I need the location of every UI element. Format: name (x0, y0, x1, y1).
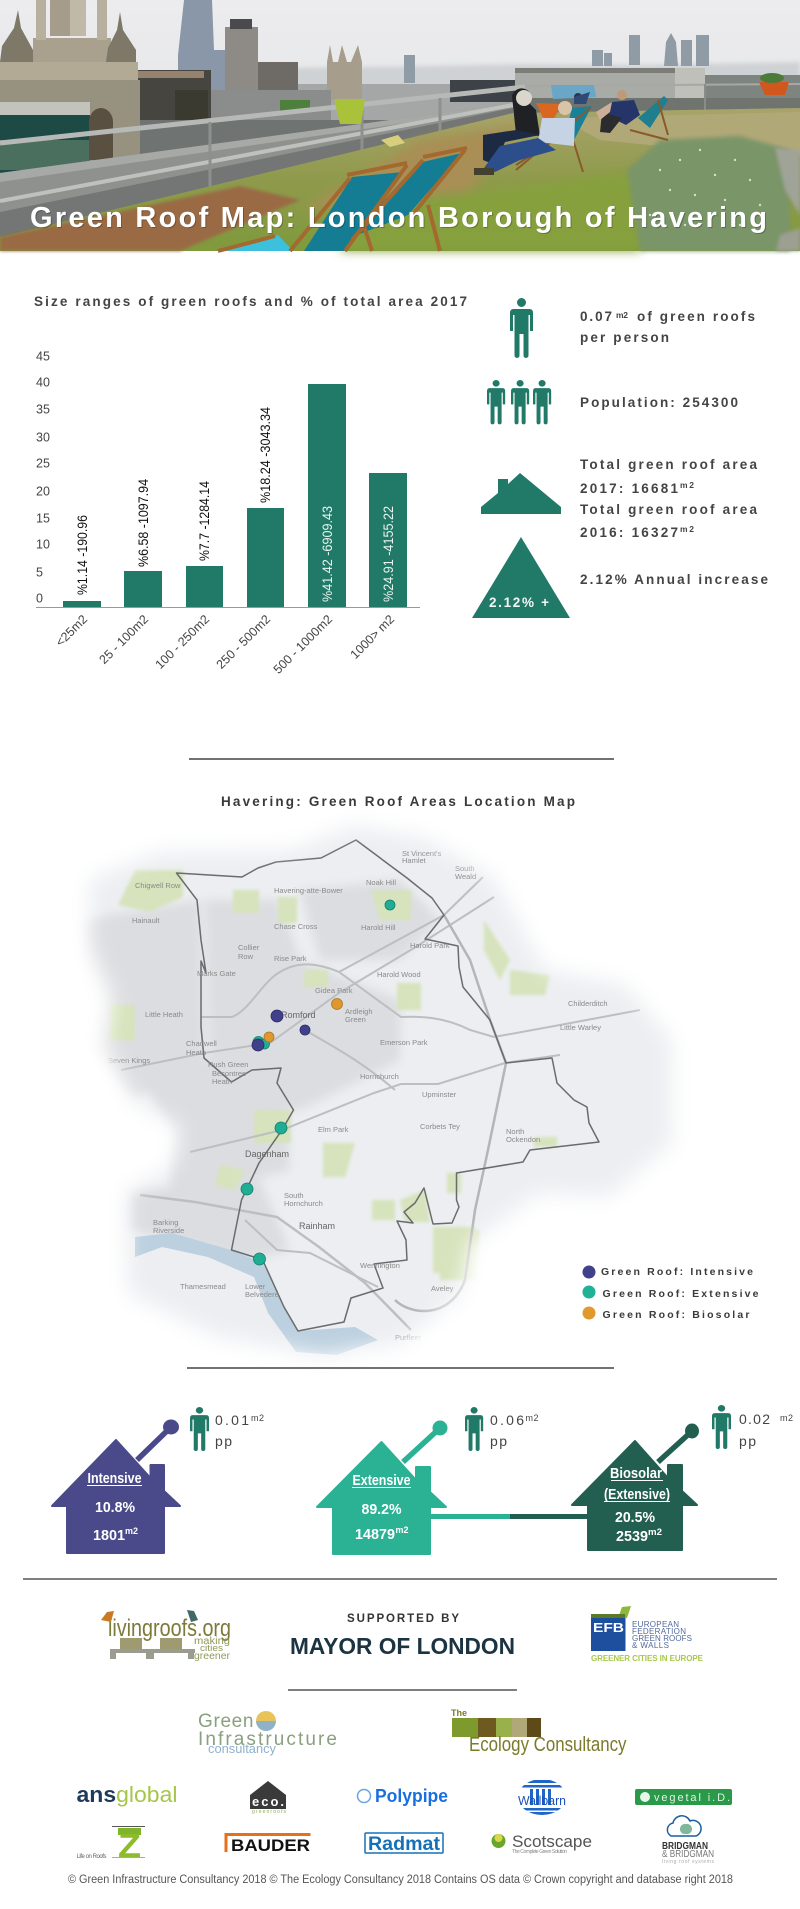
place labels: Hornchurch (360, 1072, 399, 1081)
logo: Green Infrastructure Consultancy (198, 1711, 337, 1756)
logo: livingroofs.org: greener (194, 1651, 231, 1662)
place labels: Rise Park (274, 954, 307, 963)
stat: total area: Total green roof area (580, 502, 757, 517)
place labels: Seven Kings (108, 1056, 150, 1065)
place labels: Romford (281, 1010, 316, 1020)
bar value labels: %18.24 -3043.34 (258, 407, 273, 503)
logo: Scotscape: The Complete Green Solution (512, 1849, 567, 1855)
logo: European Federation Green Roofs: EUROPEAN (632, 1620, 679, 1629)
y axis labels: 5 (36, 566, 43, 580)
logo: ZinCo: Life on Roofs (76, 1854, 106, 1860)
place labels: Noak Hill (366, 878, 396, 887)
logo: eco green roofs: greenroofs (252, 1809, 286, 1815)
supported by: Mayor of London: SUPPORTED BY (347, 1613, 459, 1625)
logo: Bridgman & Bridgman: BRIDGMAN (662, 1841, 708, 1852)
logo: Radmat: Radmat (368, 1834, 441, 1855)
logo: Green Infrastructure Consultancy: consultancy (208, 1741, 276, 1756)
markers: biosolar (264, 998, 342, 1042)
place labels: Ockendon (506, 1135, 540, 1144)
place labels: Becontree (212, 1069, 246, 1078)
markers: extensive (241, 900, 395, 1265)
place labels: Rainham (299, 1221, 335, 1231)
person stat: biosolar: pp (739, 1433, 756, 1449)
y axis labels: 30 (36, 430, 50, 444)
supported by: Mayor of London: MAYOR OF LONDON (290, 1633, 515, 1659)
icon: three people (487, 380, 551, 424)
stone building and tower (0, 0, 140, 200)
place labels: Chadwell (186, 1039, 217, 1048)
panel: biosolar house: m2 (648, 1527, 662, 1537)
place labels: Harold Park (410, 941, 450, 950)
map legend: Green Roof: Intensive (601, 1266, 753, 1278)
place labels: Harold Hill (361, 923, 396, 932)
place labels: Row (238, 952, 254, 961)
logo: vegetal i.D. (635, 1789, 732, 1805)
y axis labels: 45 (36, 350, 50, 364)
logo: The Ecology Consultancy (451, 1708, 626, 1756)
y axis labels: 25 (36, 456, 50, 470)
panel: extensive house: Extensive (352, 1472, 410, 1489)
place labels: Lower (245, 1282, 266, 1291)
panel: intensive house: Intensive (88, 1470, 142, 1487)
person stat: intensive: pp (215, 1433, 232, 1449)
y axis labels: 10 (36, 538, 50, 552)
bar value labels: %24.91 -4155.22 (381, 506, 396, 602)
place labels: Chase Cross (274, 922, 318, 931)
panel: biosolar house: (Extensive) (604, 1486, 670, 1503)
place labels: Purfleet (395, 1333, 422, 1342)
chart heading: Size ranges of green roofs and % of total area 2017 (34, 294, 467, 309)
place labels: Aveley (431, 1284, 454, 1293)
place labels: Childerditch (568, 999, 608, 1008)
stat: population: Population: 254300 (580, 395, 738, 410)
stat: total area: Total green roof area (580, 457, 757, 472)
hero photo: rooftop meadow with deck chairs and London skyline (0, 0, 800, 251)
logo: European Federation Green Roofs: GREENER CITIES IN EUROPE (591, 1654, 704, 1663)
bar value labels: %1.14 -190.96 (75, 515, 90, 595)
panel: extensive house: 14879 (355, 1526, 395, 1543)
title: Green Roof Map: London Borough of Havering (30, 202, 767, 234)
logo: Green Infrastructure Consultancy: Infrastructure (198, 1729, 337, 1750)
stat: total area (580, 457, 757, 540)
panel: extensive house (317, 1420, 448, 1554)
logo: Bridgman & Bridgman: & BRIDGMAN (662, 1849, 714, 1860)
panel: intensive house (52, 1420, 180, 1553)
planters and sign (334, 73, 789, 147)
place labels: Gidea Park (315, 986, 353, 995)
logo: European Federation Green Roofs: & WALLS (632, 1641, 669, 1650)
map legend: Green Roof: Biosolar (602, 1309, 750, 1321)
logo: livingroofs.org (101, 1610, 231, 1662)
panel: extensive house: m2 (396, 1525, 408, 1535)
logo: European Federation Green Roofs: GREEN ROOFS (632, 1634, 692, 1643)
person stat: biosolar: m2 (780, 1413, 793, 1423)
logo: European Federation Green Roofs: EFB (593, 1620, 624, 1635)
person stat: extensive: 0.06 (490, 1412, 524, 1428)
logo: European Federation Green Roofs (591, 1606, 704, 1663)
logo: Scotscape (492, 1832, 592, 1855)
category labels: 25 - 100m2 (97, 612, 151, 667)
logo: Scotscape: Scotscape (512, 1832, 592, 1851)
y axis labels: 15 (36, 512, 50, 526)
place labels: Barking (153, 1218, 178, 1227)
location map (84, 826, 674, 1356)
panel: biosolar house: 2539 (616, 1528, 648, 1545)
place labels: Marks Gate (197, 969, 236, 978)
stat: per person: m2 (616, 310, 628, 320)
category labels (53, 612, 397, 677)
category labels: 1000> m2 (348, 612, 397, 662)
panel: key statistics (472, 298, 768, 618)
green spaces (110, 870, 557, 1280)
place labels: Riverside (153, 1226, 184, 1235)
place labels: Harold Wood (377, 970, 421, 979)
icon: increase triangle (472, 537, 570, 618)
person stat: intensive (190, 1407, 264, 1451)
logo: livingroofs.org: livingroofs.org (108, 1615, 231, 1642)
logo: eco green roofs (250, 1781, 286, 1815)
place labels: Corbets Tey (420, 1122, 460, 1131)
copyright line: © Green Infrastructure Consultancy 2018 © The Ecology Consultancy 2018 Contains OS data © Crown copyright and database right 2018 (68, 1874, 733, 1886)
y axis labels (36, 350, 50, 606)
stat: per person (580, 309, 755, 345)
place labels: North (506, 1127, 524, 1136)
place labels: Little Heath (145, 1010, 183, 1019)
logo: ansglobal: ansglobal (76, 1782, 178, 1807)
logo: European Federation Green Roofs: FEDERATION (632, 1627, 686, 1636)
logo: Bauder: BAUDER (231, 1836, 310, 1855)
connector between extensive and biosolar (431, 1514, 588, 1519)
title: Green Roof Map: London Borough of Havering (31, 203, 768, 235)
place labels: Hainault (132, 916, 160, 925)
logo: livingroofs.org: cities (200, 1643, 223, 1654)
logo: vegetal i.D.: vegetal i.D. (654, 1792, 730, 1804)
y axis labels: 0 (36, 592, 43, 606)
logo: Green Infrastructure Consultancy: Green (198, 1711, 254, 1732)
bars (63, 384, 407, 607)
logo: The Ecology Consultancy: The (451, 1708, 467, 1718)
place labels: South (455, 864, 475, 873)
place labels: South (284, 1191, 304, 1200)
panel: intensive house: 1801 (93, 1527, 125, 1544)
logo: Bridgman & Bridgman (662, 1816, 714, 1865)
logo: ZinCo: Z (118, 1827, 141, 1864)
place labels: Weald (455, 872, 476, 881)
bar value labels (75, 407, 396, 602)
place labels (108, 849, 608, 1342)
logo: ZinCo (76, 1826, 145, 1864)
stat: per person: per person (580, 330, 669, 345)
stat: annual increase: 2.12% Annual increase (580, 572, 768, 587)
place labels: Belvedere (245, 1290, 279, 1299)
person stat: extensive: m2 (526, 1413, 538, 1423)
place labels: Hornchurch (284, 1199, 323, 1208)
panel: intensive house: 10.8% (95, 1499, 135, 1516)
category labels: 250 - 500m2 (214, 612, 273, 672)
map legend (582, 1266, 759, 1321)
category labels: 500 - 1000m2 (271, 612, 335, 677)
category labels: 100 - 250m2 (153, 612, 212, 672)
urban texture (80, 880, 440, 1260)
person stat: intensive: m2 (251, 1413, 264, 1423)
borough boundary (176, 840, 599, 1331)
markers: intensive (252, 1010, 310, 1051)
panel: biosolar house (572, 1424, 699, 1550)
person stat: extensive: pp (490, 1433, 507, 1449)
panel: intensive house: m2 (125, 1526, 138, 1536)
person stat: biosolar: 0.02 (739, 1411, 770, 1427)
logo: Polypipe: Polypipe (375, 1786, 448, 1806)
stat: total area: 2016: 16327 (580, 525, 678, 540)
place labels: Havering-atte-Bower (274, 886, 343, 895)
category labels: <25m2 (53, 612, 90, 649)
bar value labels: %6.58 -1097.94 (136, 479, 151, 567)
y axis labels: 35 (36, 402, 50, 416)
seated people and chairs (474, 88, 668, 175)
place labels: Wennington (360, 1261, 400, 1270)
place labels: Ardleigh (345, 1007, 373, 1016)
bar value labels: %41.42 -6909.43 (320, 506, 335, 602)
logo: Wallbarn (518, 1780, 566, 1815)
place labels: Heath (186, 1048, 206, 1057)
place labels: Green (345, 1015, 366, 1024)
roads (121, 877, 640, 1330)
bar value labels: %7.7 -1284.14 (197, 481, 212, 561)
icon: house (481, 473, 561, 514)
person stat: intensive: 0.01 (215, 1412, 249, 1428)
person stat: extensive (465, 1407, 538, 1451)
logo: livingroofs.org: making (194, 1636, 230, 1647)
panel: size range bar chart (34, 294, 467, 677)
person stat: biosolar (712, 1405, 793, 1449)
place labels: Elm Park (318, 1125, 349, 1134)
supported by: Mayor of London (290, 1613, 515, 1659)
roof edge parapet and rails (0, 84, 800, 238)
place labels: Chigwell Row (135, 881, 181, 890)
stat: total area: m2 (680, 480, 694, 490)
panel: biosolar house: 20.5% (615, 1509, 655, 1526)
map legend: Green Roof: Extensive (602, 1288, 759, 1300)
place labels: Heath (212, 1077, 232, 1086)
stat: total area: 2017: 16681 (580, 481, 678, 496)
place labels: Little Warley (560, 1023, 601, 1032)
grass roof (0, 108, 800, 251)
stat: per person: 0.07 (580, 309, 612, 324)
foreground deck chairs (218, 148, 467, 251)
panel: extensive house: 89.2% (362, 1501, 402, 1518)
y axis labels: 20 (36, 484, 50, 498)
logo: Bridgman & Bridgman: living roof systems (662, 1859, 714, 1865)
icon: person (510, 298, 533, 358)
place labels: Thamesmead (180, 1282, 226, 1291)
place labels: Collier (238, 943, 260, 952)
stat: per person: of green roofs (637, 309, 755, 324)
place labels: Hamlet (402, 856, 427, 865)
logo: The Ecology Consultancy: Ecology Consultancy (469, 1734, 626, 1756)
river Thames (135, 1233, 378, 1355)
place labels: Emerson Park (380, 1038, 428, 1047)
stat: total area: m2 (680, 524, 694, 534)
logo: eco green roofs: eco. (252, 1794, 284, 1809)
y axis labels: 40 (36, 376, 50, 390)
place labels: Upminster (422, 1090, 457, 1099)
place labels: Dagenham (245, 1149, 289, 1159)
panel: biosolar house: Biosolar (610, 1465, 662, 1482)
place labels: Rush Green (208, 1060, 248, 1069)
icon: increase triangle: 2.12% + (489, 595, 549, 610)
map heading: Havering: Green Roof Areas Location Map (221, 794, 575, 809)
logo: Wallbarn: Wallbarn (518, 1793, 566, 1808)
place labels: St Vincent's (402, 849, 441, 858)
